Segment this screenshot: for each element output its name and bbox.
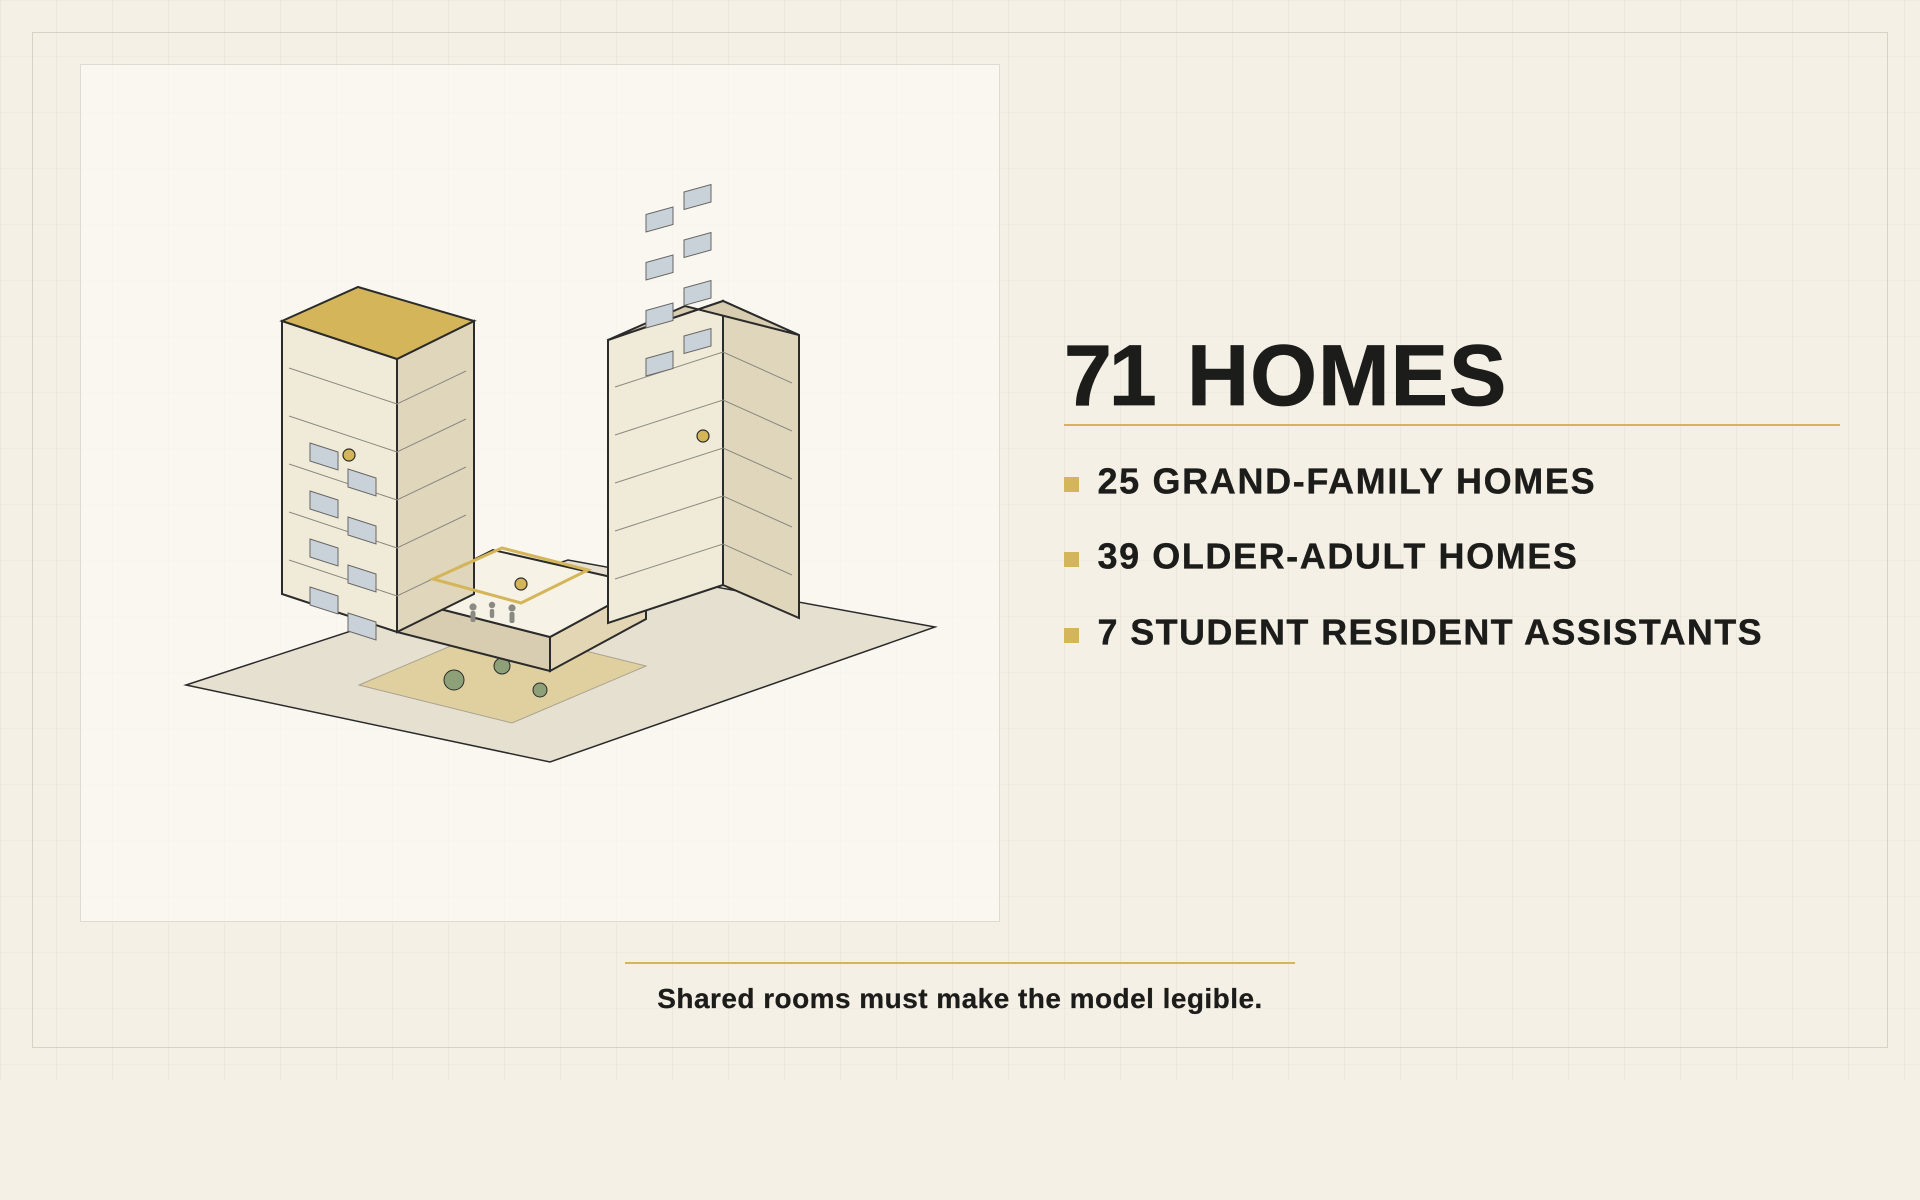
list item: grand-family homes: 25 GRAND-FAMILY HOMES	[1098, 460, 1596, 502]
illustration: housing model	[186, 184, 935, 762]
left tower	[282, 287, 474, 640]
people	[469, 602, 516, 623]
right tower	[608, 184, 799, 623]
ground plane	[186, 560, 935, 762]
caption: Shared rooms must make the model legible.	[657, 983, 1263, 1014]
panel: illustration background	[80, 64, 1000, 922]
right tower windows	[646, 184, 711, 376]
title: 71	[1064, 328, 1155, 424]
courtyard	[359, 628, 646, 723]
podium: shared rooms	[397, 550, 646, 671]
caption rule	[625, 962, 1295, 964]
title: HOMES	[1187, 328, 1507, 424]
shared room outline	[433, 548, 588, 603]
list item: older-adult homes: 39 OLDER-ADULT HOMES	[1098, 536, 1578, 576]
left tower windows	[310, 443, 376, 640]
trees	[444, 658, 547, 697]
left tower marker	[343, 449, 355, 461]
podium marker	[515, 578, 527, 590]
title rule	[1064, 424, 1840, 426]
right tower marker	[697, 430, 709, 442]
list item: student resident assistants: 7 STUDENT RESIDENT ASSISTANTS	[1098, 612, 1763, 652]
